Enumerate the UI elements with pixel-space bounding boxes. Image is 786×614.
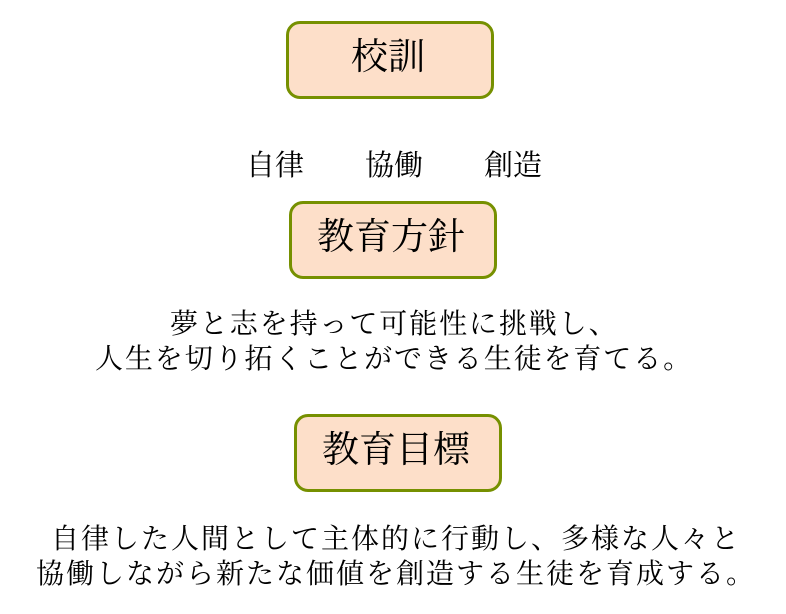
text: school motto values: 協働 [365,150,423,182]
heading box: 教育目標 [294,414,502,492]
text: educational policy: 人生を切り拓くことができる生徒を育てる。 [95,344,693,375]
text: school motto values: 創造 [484,150,542,182]
text: educational goals: 協働しながら新たな価値を創造する生徒を育成する。 [36,559,756,590]
text: educational goals: 自律した人間として主体的に行動し、多様な人々と [51,524,741,555]
heading box: 教育方針 [288,200,496,278]
heading box: 校訓 [286,20,494,98]
heading box: 教育目標: 教育目標 [322,430,470,470]
text: school motto values: 自律 [246,150,304,182]
heading box: 教育方針: 教育方針 [317,216,465,258]
text: educational policy [95,309,693,375]
text: educational policy: 夢と志を持って可能性に挑戦し、 [170,309,619,340]
text: school motto values [246,150,542,182]
text: educational goals [36,524,756,590]
heading box: 校訓: 校訓 [351,36,425,78]
